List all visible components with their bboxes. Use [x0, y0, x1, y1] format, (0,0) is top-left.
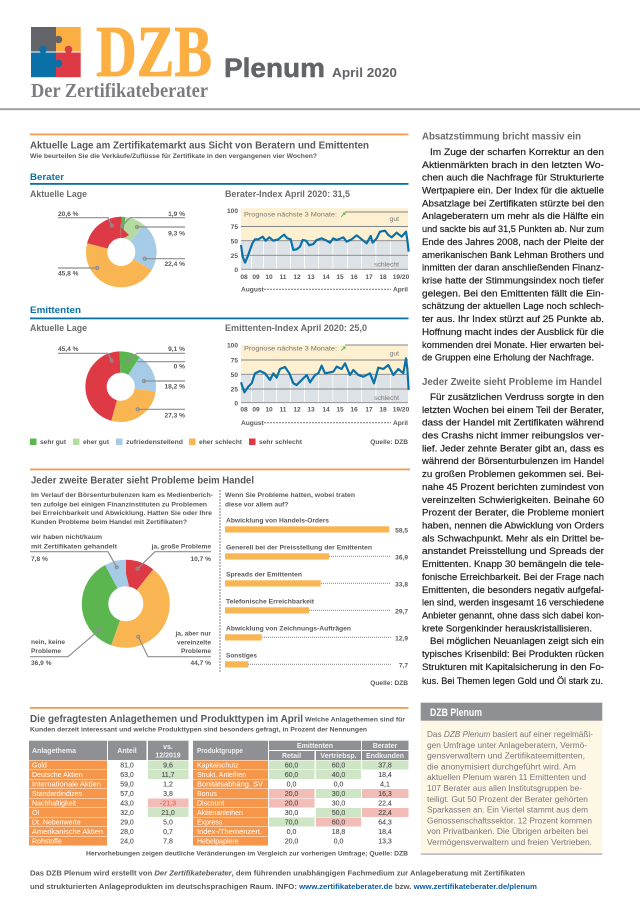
body text: nahe 45 Prozent berichten zumindest von [422, 482, 604, 492]
body text: krete Sorgenkinder herauskristallisieren. [422, 623, 592, 633]
table: Produkttypen: Discount [197, 800, 224, 808]
table: Produkttypen: 20,0 [285, 791, 298, 798]
body text: lief. Jeder zehnte Berater gibt an, dass es [422, 443, 605, 453]
line chart: Emittenten-Index: 11 [280, 406, 287, 414]
line chart: Emittenten-Index: 19/20 [393, 406, 410, 414]
line chart: Berater-Index: 50 [231, 238, 238, 246]
table: Produkttypen: 16,3 [378, 791, 392, 798]
line chart: Berater-Index: ↗ [340, 210, 346, 219]
line chart: Berater-Index: 11 [280, 274, 287, 281]
donut labels: Handel: mit Zertifikaten gehandelt [31, 544, 118, 550]
line chart: Berater-Index: 09 [252, 274, 260, 281]
table: Produkttypen: 20,0 [285, 838, 298, 846]
donut labels: Emittenten [58, 346, 185, 420]
donut: Berater [97, 227, 146, 277]
table: Anlagethemen: 5,0 [163, 820, 173, 826]
donut labels: Handel: 36,9 % [31, 660, 52, 667]
body text: schätzung der aktuellen Lage noch schlech- [422, 301, 604, 311]
icon: puzzle logo [31, 27, 81, 77]
line chart: Emittenten-Index: 25 [231, 386, 238, 394]
body text: Im Zuge der scharfen Korrektur an den [430, 147, 604, 157]
text column: Absatzstimmung [422, 132, 604, 363]
line chart: Emittenten-Index: 14 [322, 406, 330, 414]
table: Produkttypen: 60,0 [332, 820, 345, 826]
table: Anlagethemen: Standardindizes [32, 791, 83, 798]
line chart: Emittenten-Index: 17 [365, 406, 373, 414]
panel: Probleme beim Handel [30, 468, 410, 687]
line chart: Berater-Index: 0 [234, 267, 238, 274]
donut labels: Handel: 7,8 % [31, 556, 48, 563]
question left: bei Erreichbarkeit und Abwicklung. Hatten Sie oder Ihre [31, 510, 212, 517]
line chart: Berater-Index: April [393, 286, 408, 294]
table: Anlagethemen: 57,0 [120, 791, 134, 798]
table: Produkttypen: 22,4 [378, 810, 392, 817]
line chart: Emittenten-Index: August [241, 420, 265, 427]
donut: Handel [95, 573, 157, 635]
source: Quelle: DZB [370, 680, 408, 687]
donut labels: Handel: Probleme [31, 648, 61, 655]
heading: Jeder Zweite sieht Probleme im Handel [422, 377, 602, 388]
subheading: Berater-Index: Berater-Index April 2020: 31,5 [225, 189, 350, 199]
table: Anlagethemen: Amerikanische Aktien [32, 829, 103, 836]
line chart: Berater-Index: August [241, 286, 265, 294]
donut labels: Handel: vereinzelte [177, 640, 211, 646]
body text: Absatzlage bei Zertifikaten stürzte bei den [422, 198, 604, 208]
table: Anlagethemen: 43,0 [120, 800, 134, 808]
body text: Für zusätzlichen Verdruss sorgte in den [430, 392, 604, 402]
table: Anlagethemen: Gold [32, 762, 47, 770]
body text: de Gruppen eine Erholung der Nachfrage. [422, 353, 594, 363]
donut: Emittenten [96, 362, 145, 411]
line chart: Berater-Index: 18 [379, 274, 387, 281]
line chart: Berater-Index: 100 [227, 208, 238, 215]
body text: krise hatte der Stimmungsindex noch tiefer [422, 276, 604, 286]
body text: Strukturen mit Kapitalsicherung in den Fo- [422, 662, 604, 672]
box text: Genossenschaftssektor. 12 Prozent kommen [427, 816, 592, 825]
legend: eher gut [83, 439, 110, 446]
section heading: Emittenten: Emittenten [30, 305, 81, 316]
table: Anlagethemen: Rohstoffe [32, 838, 62, 846]
bar chart: Probleme: 12,9 [395, 636, 408, 642]
footer: Das DZB Plenum wird erstellt von Der Zertifikateberater, dem führenden unabhängigen Fachmedium zur Anlageberatung mit Zertifikaten [30, 868, 525, 878]
line chart: Berater-Index: 08 [240, 274, 248, 281]
section heading: Berater: Berater [30, 172, 64, 183]
table: Produkttypen: 18,8 [332, 829, 345, 836]
donut labels: Handel: Probleme [181, 648, 211, 655]
body text: anstandet Preisstellung und Spreads der [422, 546, 604, 556]
box text: von Privatbanken. Die Übrigen arbeiten bei [427, 827, 588, 836]
table: Anlagethemen: 28,0 [120, 829, 134, 836]
table: Anlagethemen: 29,0 [120, 820, 134, 826]
line chart: Berater-Index: 17 [365, 274, 373, 281]
donut labels: Berater [58, 211, 185, 278]
table: Anlagethemen: 9,6 [163, 762, 173, 770]
table: Produkttypen: Endkunden [366, 753, 404, 760]
table: Produkttypen: 60,0 [332, 762, 345, 770]
bar chart: Probleme: Telefonische Erreichbarkeit [226, 598, 315, 606]
table: Produkttypen: Bonus [197, 791, 217, 798]
heading: Die gefragtesten Anlagethemen und Produkttypen im April [30, 714, 303, 725]
body text: haben, nennen die Abwicklung von Orders [422, 520, 605, 530]
line chart: Berater-Index: 12 [293, 274, 301, 281]
legend: sehr gut [40, 439, 67, 446]
table: Anlagethemen: 7,8 [163, 838, 173, 846]
donut labels: Berater: 1,9 % [168, 211, 185, 218]
table: Anlagethemen: 21,0 [161, 810, 175, 817]
body text: Emittenten. Knapp 30 bemängeln die tele- [422, 559, 604, 569]
line chart: Emittenten-Index: 09 [252, 406, 260, 414]
line chart: Berater-Index: 19/20 [393, 274, 410, 281]
bar chart: Probleme: 33,8 [395, 582, 408, 588]
line chart: Berater-Index: 10 [265, 274, 273, 281]
body text: vereinzelten Schwierigkeiten. Beinahe 60 [422, 495, 604, 505]
bar chart: Probleme: 29,7 [395, 608, 408, 616]
line chart: Berater-Index [227, 208, 410, 294]
heading: Aktuelle Lage am Zertifikatemarkt aus Sicht von Beratern und Emittenten [30, 140, 369, 152]
donut labels: Handel: 44,7 % [190, 660, 211, 667]
line chart: Berater-Index: gut [390, 216, 399, 223]
table: Anlagethemen: 12/2019 [155, 752, 181, 760]
table: Produkttypen: Bonitätsabhäng. SV [197, 782, 263, 788]
donut labels: Emittenten: 27,3 % [164, 412, 185, 420]
table: Produkttypen: 30,0 [332, 800, 345, 808]
box text: die anonymisiert durchgeführt wird. Am [427, 762, 576, 771]
table: Produkttypen: 18,4 [378, 829, 392, 836]
table: Produkttypen: Strukt. Anleihen [197, 772, 246, 779]
table note: Hervorhebungen zeigen deutliche Veränderungen im Vergleich zur vorherigen Umfrage; Quelle: DZB [86, 850, 408, 858]
line chart: Emittenten-Index [227, 342, 410, 427]
table: Anlagethemen: 59,0 [120, 782, 134, 788]
box text: gensverwaltern und Zertifikateemittenten, [427, 752, 585, 761]
body text: zu großen Problemen gekommen sei. Bei- [422, 469, 604, 479]
bar chart: Probleme: Spreads der Emittenten [226, 572, 302, 578]
body text: als Schwachpunkt. Mehr als ein Drittel be- [422, 533, 604, 543]
body text: amerikanischen Bank Lehman Brothers und [422, 250, 604, 260]
body text: fonische Erreichbarkeit. Bei der Frage nach [422, 572, 604, 582]
body text: Emittenten, die besonders negativ aufgefal- [422, 585, 604, 595]
line chart: Emittenten-Index: 10 [265, 406, 273, 414]
table: Anlagethemen [29, 741, 188, 846]
date: April 2020 [332, 65, 397, 80]
question left [31, 492, 213, 526]
body text: letzten Wochen bei einem Teil der Berater, [422, 405, 604, 415]
body text: typisches Krisenbild: Bei Produkten rücken [422, 649, 604, 659]
bar chart: Probleme: 7,7 [399, 662, 408, 670]
line chart: Berater-Index: 16 [350, 274, 358, 281]
legend: eher schlecht [199, 439, 243, 446]
table: Produkttypen: Express [197, 820, 223, 826]
body text: Hoffnung macht indes der Ausblick für die [422, 327, 604, 337]
donut labels: Emittenten: 9,1 % [168, 346, 185, 353]
donut labels: Emittenten: 45,4 % [58, 346, 79, 353]
table: Produkttypen: 0,0 [334, 838, 343, 846]
donut labels: Emittenten: 0 % [174, 364, 185, 370]
body text: Prozent der Berater, die Probleme moniert [422, 508, 605, 518]
line chart: Emittenten-Index: Prognose nächste 3 Monate: [244, 346, 337, 352]
table: Produkttypen: 64,3 [378, 820, 392, 826]
table: Produkttypen: 0,0 [287, 782, 296, 788]
question left: ten zufolge bei einigen Finanzinstituten zu Problemen [31, 502, 207, 508]
line chart: Emittenten-Index: April [393, 420, 408, 427]
box text: 107 Berater aus allen Institutsgruppen be- [427, 784, 582, 793]
table: Anlagethemen: vs. [163, 744, 173, 751]
table: Produkttypen: 30,0 [332, 791, 345, 798]
line chart: Berater-Index: 25 [231, 253, 238, 260]
table: Produkttypen: 0,0 [334, 782, 343, 788]
line chart: Emittenten-Index: 100 [227, 342, 238, 350]
table: Anlagethemen: 81,0 [120, 762, 134, 770]
table: Produkttypen: 30,0 [285, 810, 298, 817]
table: Produkttypen: Emittenten [297, 743, 333, 750]
bar chart: Probleme: 36,9 [395, 554, 408, 562]
table: Produkttypen: 13,3 [378, 838, 392, 846]
donut labels: Handel [30, 534, 211, 667]
bar chart: Probleme: Abwicklung von Zeichnungs-Aufträgen [226, 626, 351, 632]
table: Anlagethemen: Dt. Nebenwerte [32, 820, 81, 826]
legend: zufriedenstellend [126, 439, 183, 446]
table: Produkttypen: 40,0 [332, 772, 345, 779]
body text: Bei möglichen Neuanlagen zeigt sich ein [430, 636, 604, 646]
table: Anlagethemen: Nachhaltigkeit [32, 800, 76, 808]
table: Produkttypen: Hebelpapiere [197, 838, 239, 846]
table: Produkttypen: 60,0 [285, 762, 298, 770]
body text: ter aus. Ihr Index stürzt auf 25 Punkte ab. [422, 314, 604, 324]
body text: kus. Bei Themen legen Gold und Öl stark zu. [422, 676, 603, 686]
donut labels: Emittenten: 18,2 % [164, 384, 185, 390]
line chart: Emittenten-Index: 75 [231, 358, 238, 364]
question [30, 716, 405, 734]
table: Anlagethemen: 63,0 [120, 772, 134, 779]
table: Produkttypen: Index-/Themenzert. [197, 829, 262, 836]
table: Produkttypen: 18,4 [378, 772, 392, 779]
line chart: Emittenten-Index: ↗ [340, 344, 346, 353]
table: Produkttypen: Kapitalschutz [197, 762, 239, 770]
panel: Anlagethemen und Produkttypen [29, 707, 408, 858]
box text: gen Umfrage unter Anlageberatern, Vermö- [427, 741, 587, 750]
box text [427, 730, 593, 847]
body text: Wertpapiere ein. Der Index für die aktuelle [422, 186, 604, 196]
bar chart: Probleme: 58,5 [395, 528, 408, 534]
heading: Jeder zweite Berater sieht Probleme beim Handel [31, 476, 254, 486]
donut labels: Handel: wir haben nicht/kaum [30, 534, 102, 541]
body text: chen auch die Nachfrage für Strukturierte [422, 173, 604, 183]
table: Produkttypen: Retail [282, 753, 301, 760]
bar chart: Probleme: diese vor allem auf? [225, 502, 288, 508]
box text: aktuellen Plenum waren 11 Emittenten und [427, 773, 586, 782]
donut labels: Handel: nein, keine [31, 639, 65, 646]
donut labels: Berater: 20,6 % [58, 211, 79, 218]
line chart: Emittenten-Index: schlecht [374, 395, 399, 402]
subheading: Emittenten-Index: Emittenten-Index April 2020: 25,0 [225, 323, 367, 333]
body text: während der Börsenturbulenzen im Handel [421, 456, 604, 466]
table: Anlagethemen: Anlagethema [32, 748, 76, 755]
table: Anlagethemen: -21,3 [160, 800, 176, 808]
bar chart: Probleme: Generell bei der Preisstellung der Emittenten [226, 544, 372, 552]
donut labels: Handel: ja, große Probleme [151, 544, 211, 550]
table: Anlagethemen: Anteil [117, 748, 137, 755]
legend: sehr schlecht [259, 439, 303, 446]
body text: gelegen. Bei den Emittenten fällt die Ein- [422, 288, 604, 298]
box text: teiligt. Gut 50 Prozent der Berater gehörten [427, 795, 588, 804]
question: Welche Anlagethemen sind für [305, 716, 405, 724]
table: Produkttypen: 0,0 [287, 829, 296, 836]
line chart: Emittenten-Index: 50 [231, 372, 238, 379]
table: Anlagethemen: Internationale Aktien [32, 782, 101, 788]
legend [30, 438, 408, 446]
panel: DZB Plenum box [421, 703, 602, 855]
body text: kommenden drei Monate. Hier erwarten bei- [422, 340, 604, 350]
question left: Im Verlauf der Börsenturbulenzen kam es Medienberich- [31, 492, 213, 499]
table: Produkttypen: Vertriebsp. [320, 753, 357, 760]
footer: und strukturierten Anlageprodukten im deutschsprachigen Raum. INFO: www.zertifikateberater.de bzw. www.zertifikateberater.de/plenum [30, 882, 537, 891]
table: Produkttypen: 20,0 [285, 800, 298, 808]
logo wordmark DZB: DZB [96, 11, 212, 92]
table: Produkttypen: 50,0 [332, 810, 345, 817]
question: Kunden derzeit interessant und welche Produkttypen sind besonders gefragt, in Prozent der Nennungen [30, 726, 367, 734]
bar chart: Probleme: Wenn Sie Probleme hatten, wobei traten [225, 492, 355, 499]
box text: Sparkassen an. Ein Viertel stammt aus dem [427, 806, 588, 815]
Plenum title: Plenum [224, 53, 325, 83]
table: Produkttypen: 4,1 [380, 782, 390, 788]
body text: und sackte bis auf 31,5 Punkten ab. Nur zum [422, 224, 604, 234]
table: Anlagethemen: 0,7 [163, 829, 173, 836]
line chart: Emittenten-Index: 13 [307, 406, 315, 414]
tagline: Der Zertifikateberater [31, 80, 208, 102]
table: Produkttypen: 70,0 [285, 820, 298, 826]
donut labels: Berater: 22,4 % [164, 261, 185, 268]
table: Produkttypen: Produktgruppe [197, 748, 243, 755]
heading: Absatzstimmung bricht massiv ein [422, 132, 581, 142]
question: Wie beurteilen Sie die Verkäufe/Zuflüsse für Zertifikate in den vergangenen vier Wochen? [30, 153, 317, 160]
body text: Ende des Jahres 2008, nach der Pleite der [422, 237, 604, 247]
table: Anlagethemen: 1,2 [163, 782, 173, 788]
table: Anlagethemen: 32,0 [120, 810, 134, 817]
table: Anlagethemen: 3,8 [163, 791, 173, 798]
line chart: Emittenten-Index: 15 [336, 406, 344, 414]
donut labels: Handel: ja, aber nur [174, 630, 211, 638]
line chart: Berater-Index: 14 [322, 274, 330, 281]
body text: len sind, werden insgesamt 16 verschiedene [422, 598, 604, 608]
body text [421, 392, 605, 686]
table: Produkttypen [193, 741, 408, 846]
table: Produkttypen: 60,0 [285, 772, 298, 779]
body text: Anbieter genannt, ohne dass sich dabei kon- [422, 610, 604, 620]
donut labels: Berater: 9,3 % [168, 230, 185, 238]
line chart: Emittenten-Index: 08 [240, 406, 248, 414]
legend: Quelle: DZB [370, 439, 408, 446]
panel: aktuelle Lage [30, 134, 410, 446]
body text: des Crashs nicht immer reibungslos ver- [422, 430, 604, 440]
table: Anlagethemen: Deutsche Aktien [32, 772, 83, 779]
table: Anlagethemen: 24,0 [120, 838, 134, 846]
line chart: Emittenten-Index: 0 [234, 400, 238, 408]
line chart: Berater-Index: 15 [336, 274, 344, 281]
line chart: Emittenten-Index: 16 [350, 406, 358, 414]
box text: Das DZB Plenum basiert auf einer regelmäßi- [427, 730, 593, 739]
table: Produkttypen: 22,4 [378, 800, 392, 808]
body text: Aktienmärkten brach in den letzten Wo- [422, 160, 604, 170]
body text: Anlageberatern um mehr als die Hälfte ein [422, 211, 604, 221]
body text: dass der Handel mit Zertifikaten während [422, 418, 604, 428]
body text: inmitten der daran anschließenden Finanz- [422, 263, 604, 273]
table: Produkttypen: Berater [373, 743, 398, 750]
question left: Kunden Probleme beim Handel mit Zertifikaten? [31, 519, 187, 526]
subheading: Aktuelle Lage: Aktuelle Lage [30, 189, 87, 199]
line chart: Berater-Index: schlecht [374, 262, 399, 268]
text column: Jeder Zweite [421, 377, 605, 686]
bar chart: Probleme: Sonstiges [226, 652, 257, 660]
donut labels: Berater: 45,8 % [58, 270, 79, 278]
table: Anlagethemen: 11,7 [161, 772, 175, 779]
line chart: Berater-Index: 13 [307, 274, 315, 281]
line chart: Berater-Index: 75 [231, 224, 238, 231]
line chart: Berater-Index: Prognose nächste 3 Monate: [244, 212, 337, 218]
footer [30, 868, 537, 891]
table: Produkttypen: 37,8 [378, 762, 392, 770]
table: Produkttypen: Aktienanleihen [197, 810, 243, 817]
bar chart: Probleme: Abwicklung von Handels-Orders [226, 518, 329, 524]
donut labels: Handel: 10,7 % [190, 556, 211, 563]
box text: Vermögensverwaltern und freien Vertrieben. [427, 838, 592, 847]
subheading: Aktuelle Lage Emittenten: Aktuelle Lage [30, 323, 87, 333]
bar chart: Probleme [225, 492, 408, 670]
line chart: Emittenten-Index: 12 [293, 406, 301, 414]
line chart: Emittenten-Index: gut [390, 350, 399, 358]
header [0, 11, 640, 110]
box title: DZB Plenum [430, 707, 482, 719]
body text [422, 147, 604, 363]
line chart: Emittenten-Index: 18 [379, 406, 387, 414]
table: Anlagethemen: Öl [32, 809, 39, 817]
